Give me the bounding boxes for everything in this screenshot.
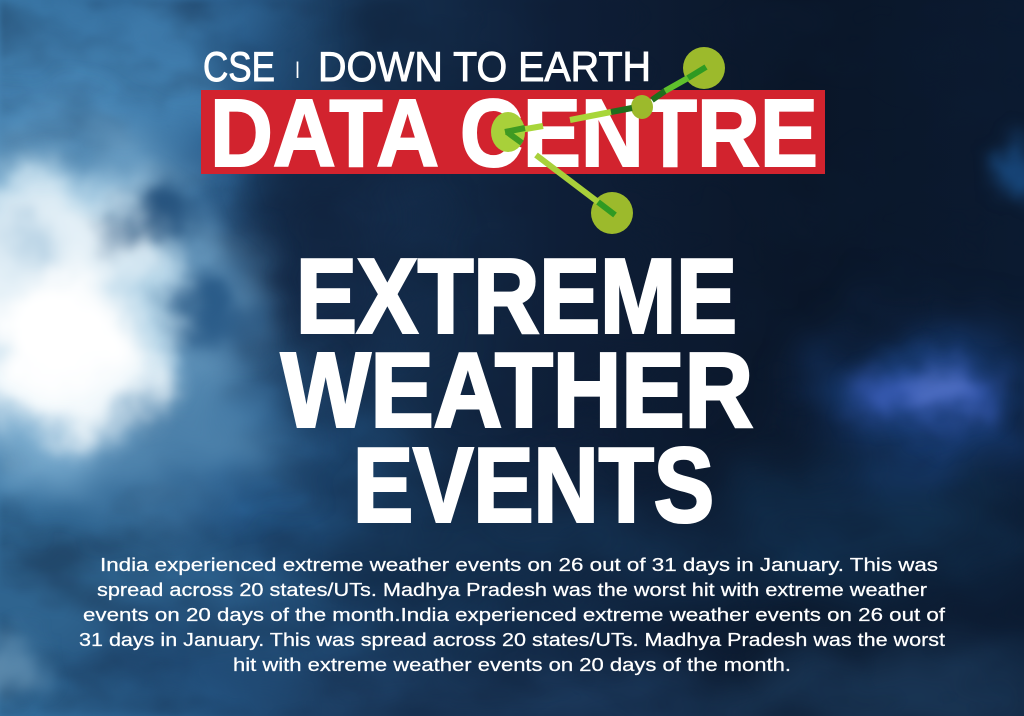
text block: description: [79, 554, 946, 675]
logo line: CSE | Down To Earth: CSE: [203, 43, 275, 90]
text block: description: hit with extreme weather events on 20 days of the month.: [233, 654, 791, 675]
title: Extreme Weather Events: [281, 238, 753, 544]
title: Extreme Weather Events: WEATHER: [281, 332, 753, 450]
text block: description: India experienced extreme weather events on 26 out of 31 days in January. This was: [100, 554, 938, 575]
text block: description: spread across 20 states/UTs. Madhya Pradesh was the worst hit with extreme weather: [97, 579, 927, 600]
logo line: CSE | Down To Earth: I: [295, 57, 300, 84]
icon: network nodes: [491, 47, 725, 234]
red banner: [201, 90, 825, 174]
logo wordmark: Data Centre: DATA CENTRE: [210, 80, 818, 187]
text block: description: 31 days in January. This was spread across 20 states/UTs. Madhya Pradesh was the worst: [79, 629, 945, 650]
title: Extreme Weather Events: EXTREME: [296, 238, 737, 356]
title: Extreme Weather Events: EVENTS: [353, 426, 714, 544]
logo line: CSE | Down To Earth: DOWN TO EARTH: [318, 43, 651, 90]
logo: CSE Down To Earth Data Centre: [201, 43, 825, 234]
text block: description: events on 20 days of the month.India experienced extreme weather events on 26 out of: [83, 604, 946, 625]
